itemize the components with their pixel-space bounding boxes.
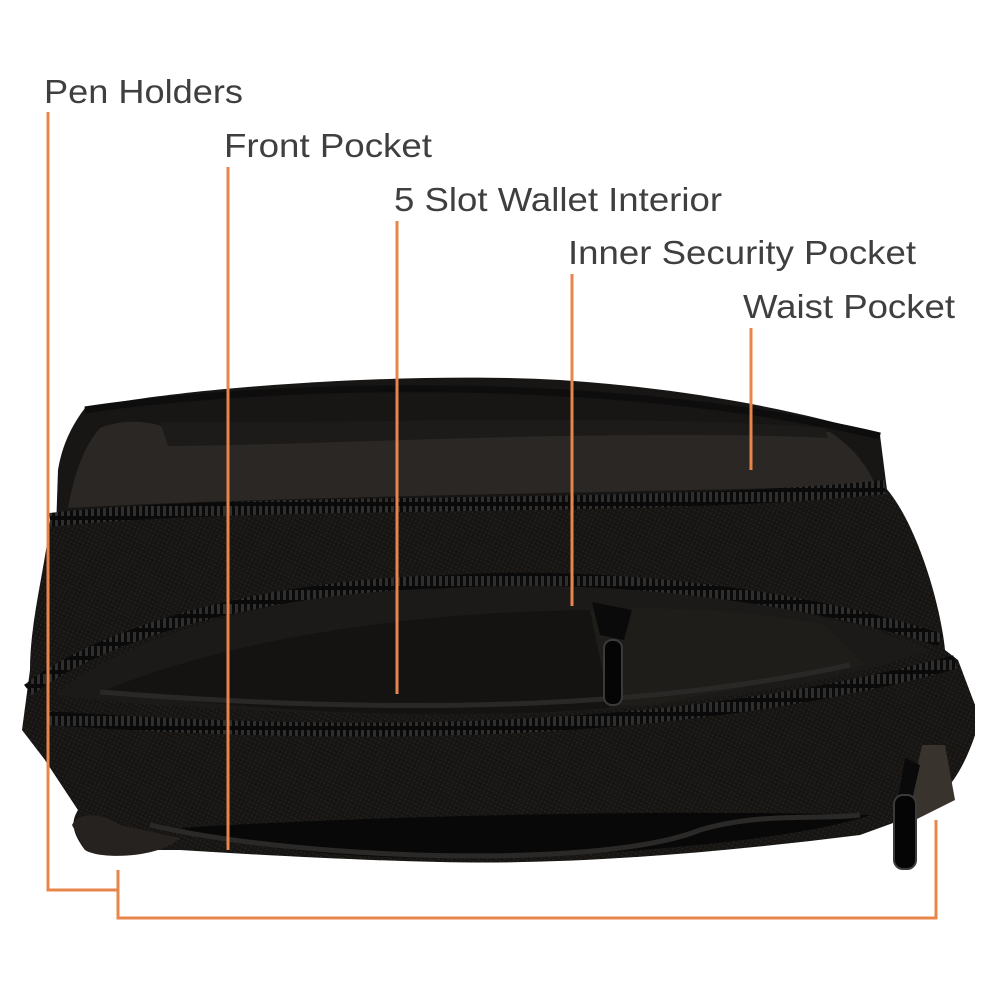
waist pocket back panel (55, 378, 887, 560)
pocket inner zipper (100, 665, 850, 706)
label: Front Pocket: Front Pocket (224, 127, 432, 164)
middle zipper (28, 579, 940, 690)
inner security pocket (590, 608, 865, 705)
waist pocket interior (68, 422, 875, 508)
photo: black waist bag (22, 378, 975, 869)
leader line: Front Pocket (226, 167, 230, 850)
leader line: Inner Security Pocket (570, 274, 574, 606)
bracket line: waist pocket span (118, 820, 936, 918)
lower zipper (48, 662, 955, 730)
leader line: Pen Holders (48, 112, 118, 890)
front flap (45, 660, 975, 815)
wallet interior slot (105, 610, 610, 714)
leader line: 5 Slot Wallet Interior (396, 221, 398, 694)
zipper pull: inner pocket (592, 602, 632, 705)
side strap loop (905, 745, 955, 825)
front pocket zipper (150, 815, 860, 856)
upper zipper (50, 487, 885, 520)
open interior compartment (55, 583, 930, 716)
label: Inner Security Pocket: Inner Security Pocket (568, 234, 916, 271)
leader line: Waist Pocket (750, 328, 752, 470)
label: Pen Holders: Pen Holders (44, 73, 243, 110)
label: 5 Slot Wallet Interior: 5 Slot Wallet Interior (394, 181, 722, 218)
rolled strap (72, 815, 180, 856)
label: Waist Pocket: Waist Pocket (743, 288, 955, 325)
top rim zipper (85, 389, 880, 436)
zipper pull: front pocket (894, 758, 920, 869)
main body of bag (22, 487, 975, 863)
waist pocket gathered lining (160, 420, 828, 446)
front pocket opening (180, 813, 870, 858)
